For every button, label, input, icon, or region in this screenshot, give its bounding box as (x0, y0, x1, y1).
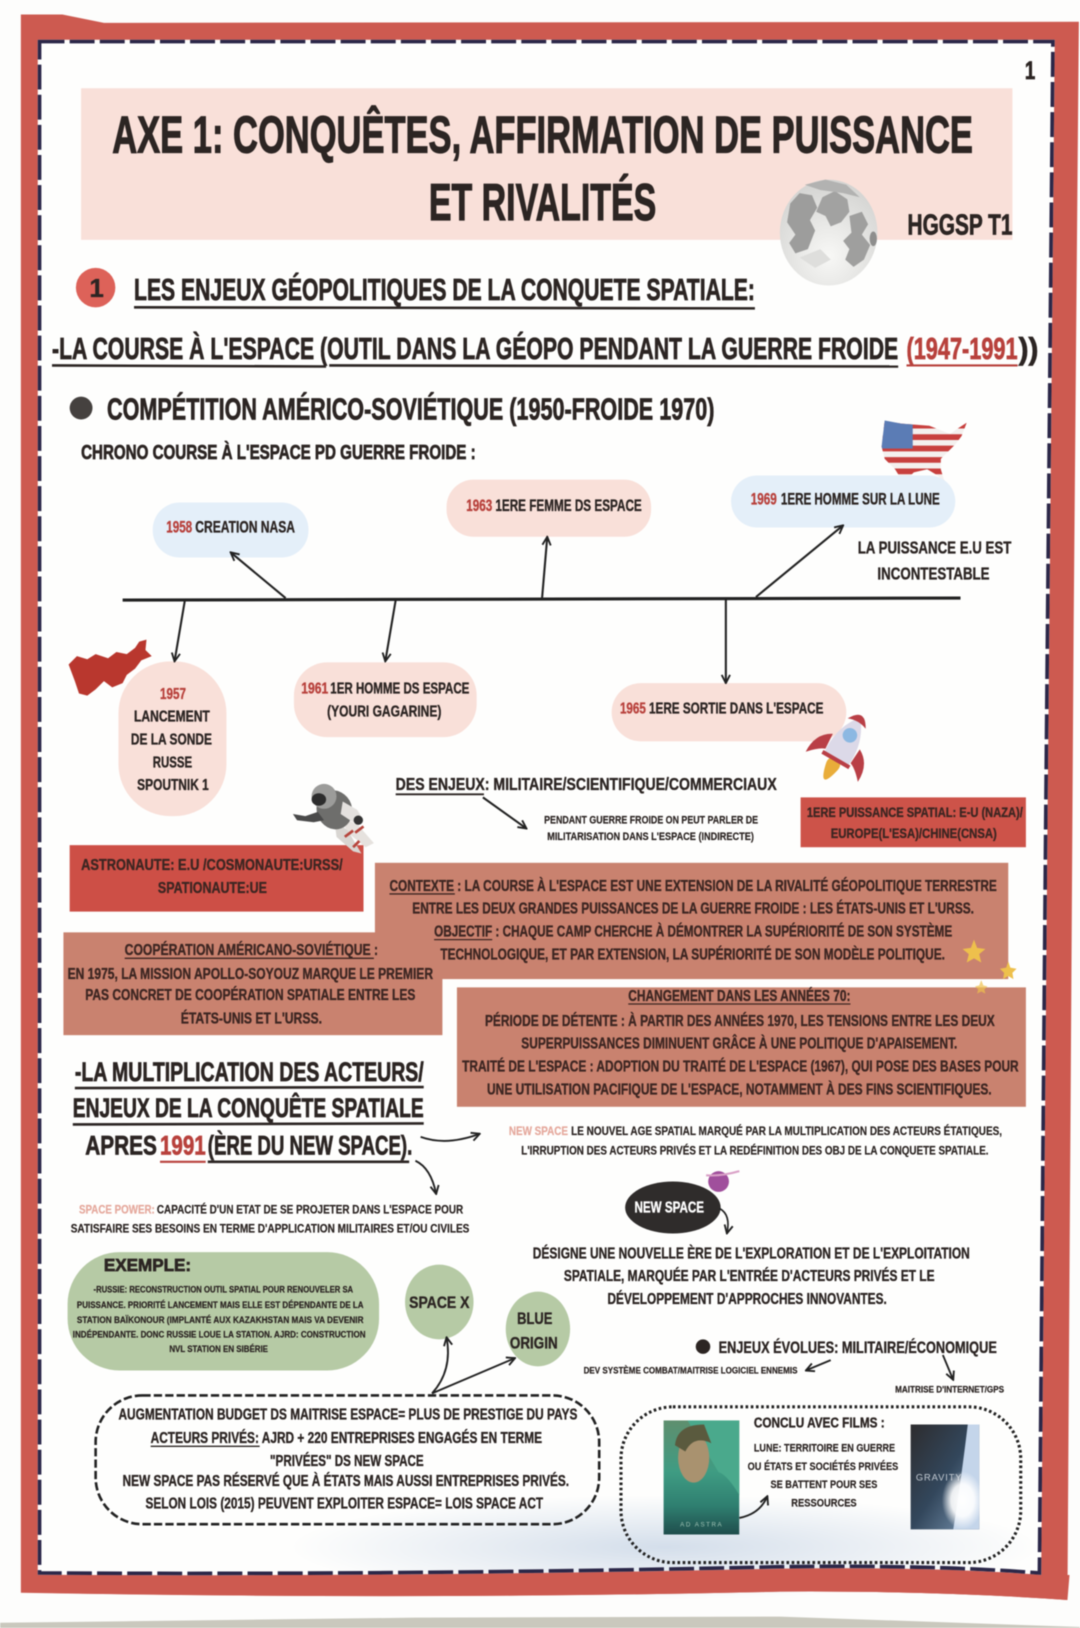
text: enjeux évolués: ENJEUX ÉVOLUES: MILITAIRE/ÉCONOMIQUE (719, 1338, 997, 1357)
box: coopération: EN 1975, LA MISSION APOLLO-SOYOUZ MARQUE LE PREMIER (68, 966, 433, 983)
note: militarisation (544, 814, 758, 843)
red band repair below shading (40, 1568, 1070, 1600)
heading: la multiplication des acteurs: (ÈRE DU NEW SPACE). (208, 1130, 412, 1161)
heading: la multiplication des acteurs (73, 1057, 424, 1162)
badge: new space: NEW SPACE (634, 1200, 704, 1217)
title banner (81, 88, 1012, 240)
note: puissance E.U: INCONTESTABLE (877, 563, 990, 583)
arrow to 1969 (756, 525, 843, 597)
timeline axis (123, 598, 960, 600)
bubble 1965: 1965 (620, 700, 646, 717)
number badge (76, 268, 115, 307)
bubble 1958 (153, 503, 308, 558)
page number: 1 (1025, 57, 1035, 85)
arrow to 1965 (725, 599, 727, 683)
box: astronaute: ASTRONAUTE: E.U /COSMONAUTE:URSS/ (81, 857, 343, 874)
panel: augmentation budget: NEW SPACE PAS RÉSERVÉ QUE À ÉTATS MAIS AUSSI ENTREPRISES PRIVÉS. (123, 1471, 569, 1490)
panel: exemple: PUISSANCE. PRIORITÉ LANCEMENT MAIS ELLE EST DÉPENDANTE DE LA (77, 1299, 364, 1310)
arrow: to blue origin (432, 1358, 515, 1393)
subheading: la course à l'espace: )) (1019, 333, 1038, 366)
panel: exemple (68, 1252, 379, 1371)
box: coopération (63, 932, 442, 1035)
note: maitrise internet: MAITRISE D'INTERNET/GPS (895, 1384, 1004, 1394)
film poster: gravity (911, 1424, 983, 1529)
box: 1ère puissance spatiale: EUROPE(L'ESA)/CHINE(CNSA) (831, 826, 997, 841)
note: puissance E.U (858, 537, 1012, 583)
text: space power definition: CAPACITÉ D'UN ETAT DE SE PROJETER DANS L'ESPACE POUR (157, 1202, 463, 1217)
arrow: des enjeux to note (483, 797, 527, 829)
panel: augmentation budget: ACTEURS PRIVÉS: AJRD + 220 ENTREPRISES ENGAGÉS EN TERME (151, 1428, 542, 1447)
bubble: blue origin: ORIGIN (510, 1334, 558, 1353)
icon: rocket (798, 700, 887, 794)
box: coopération: ÉTATS-UNIS ET L'URSS. (181, 1009, 322, 1028)
arrow to 1958 (231, 552, 286, 598)
text: désigne une nouvelle ère: DÉVELOPPEMENT D'APPROCHES INNOVANTES. (607, 1289, 887, 1308)
box: coopération: PAS CONCRET DE COOPÉRATION SPATIALE ENTRE LES (85, 985, 415, 1004)
panel: augmentation budget: AUGMENTATION BUDGET DS MAITRISE ESPACE= PLUS DE PRESTIGE DU PAYS (118, 1406, 577, 1423)
icon: planet (706, 1171, 739, 1192)
box: coopération: COOPÉRATION AMÉRICANO-SOVIÉTIQUE : (125, 940, 378, 959)
bullet heading: compétition (70, 392, 714, 426)
box: changement: SUPERPUISSANCES DIMINUENT GRÂCE À UNE POLITIQUE D'APAISEMENT. (521, 1034, 957, 1053)
number badge: 1 (89, 275, 104, 303)
bubble 1965: 1ERE SORTIE DANS L'ESPACE (649, 700, 823, 717)
title: ET RIVALITÉS (429, 174, 656, 232)
arrow: to maitrise internet (943, 1355, 953, 1380)
text: new space definition: L'IRRUPTION DES ACTEURS PRIVÉS ET LA REDÉFINITION DES OBJ DE LA CONQUETE SPATIALE. (521, 1143, 989, 1158)
section heading 1 (76, 268, 755, 308)
heading: la multiplication des acteurs: 1991 (160, 1131, 206, 1161)
panel: conclu avec films (621, 1407, 1021, 1563)
bubble: space x: SPACE X (409, 1293, 469, 1312)
note: militarisation: MILITARISATION DANS L'ESPACE (INDIRECTE) (547, 831, 754, 843)
panel: augmentation budget: "PRIVÉES" DS NEW SPACE (270, 1451, 424, 1470)
text: désigne une nouvelle ère: SPATIALE, MARQUÉE PAR L'ENTRÉE D'ACTEURS PRIVÉS ET LE (564, 1266, 935, 1285)
bubble 1961 (294, 662, 477, 737)
bubble 1961: (YOURI GAGARINE) (327, 703, 441, 720)
film poster: ad astra (664, 1420, 739, 1535)
arrow: new space to definition (720, 1209, 728, 1233)
note: puissance E.U: LA PUISSANCE E.U EST (858, 537, 1012, 557)
bubble 1963 (447, 480, 651, 537)
icon: astronaut (293, 784, 374, 853)
bubble 1958: CREATION NASA (195, 518, 295, 537)
bubble 1957: 1957 (160, 686, 186, 703)
icon: USA flag map (880, 420, 967, 479)
bubble 1961: 1ER HOMME DS ESPACE (330, 681, 469, 698)
bubble 1958: 1958 (166, 518, 192, 537)
text: space power definition: SATISFAIRE SES BESOINS EN TERME D'APPLICATION MILITAIRES ET/OU CIVILES (71, 1221, 469, 1235)
icon: stars (963, 940, 1017, 994)
box: astronaute (70, 845, 363, 912)
text: space power definition: SPACE POWER: (79, 1203, 155, 1217)
arrow: to space x (432, 1337, 448, 1393)
panel: exemple: EXEMPLE: (104, 1255, 191, 1275)
course label: HGGSP T1 (908, 210, 1012, 242)
text: désigne une nouvelle ère (533, 1243, 970, 1308)
text: new space definition (509, 1123, 1002, 1158)
box: changement (457, 986, 1026, 1107)
text: lune: RESSOURCES (791, 1498, 857, 1510)
text: lune: OU ÉTATS ET SOCIÉTÉS PRIVÉES (748, 1460, 899, 1473)
bubble 1957: DE LA SONDE (131, 731, 212, 748)
bubble 1957: SPOUTNIK 1 (137, 777, 209, 794)
heading: la multiplication des acteurs: APRES (85, 1131, 157, 1161)
bubble 1963: 1ERE FEMME DS ESPACE (495, 496, 642, 515)
box: changement: CHANGEMENT DANS LES ANNÉES 70: (628, 986, 850, 1005)
box: 1ère puissance spatiale: 1ERE PUISSANCE SPATIAL: E-U (NAZA)/ (807, 805, 1023, 820)
arrow to 1961 (385, 600, 396, 661)
arrow to 1963 (542, 537, 547, 598)
text: lune (748, 1442, 899, 1510)
table edge below sheet (0, 1617, 1080, 1628)
note: militarisation: PENDANT GUERRE FROIDE ON PEUT PARLER DE (544, 814, 758, 826)
title (112, 106, 973, 232)
bubble 1969: 1ERE HOMME SUR LA LUNE (781, 490, 940, 509)
icon: moon (780, 180, 877, 286)
bubble 1965 (612, 683, 846, 741)
heading: des enjeux: DES ENJEUX: MILITAIRE/SCIENTIFIQUE/COMMERCIAUX (396, 774, 777, 794)
bubble 1957: LANCEMENT (134, 709, 210, 726)
panel: exemple: STATION BAÏKONOUR (IMPLANTÉ AUX KAZAKHSTAN MAIS VA DEVENIR (77, 1314, 364, 1325)
arrow to 1957 (175, 600, 185, 661)
panel: exemple: -RUSSIE: RECONSTRUCTION OUTIL SPATIAL POUR RENOUVELER SA (94, 1285, 354, 1295)
arrow: to new space definition (421, 1134, 480, 1141)
bubble 1957: RUSSE (153, 754, 192, 771)
icon: USSR map (69, 640, 152, 696)
film poster: gravity: GRAVITY (916, 1473, 962, 1483)
panel: exemple: NVL STATION EN SIBÉRIE (169, 1343, 268, 1354)
bubble: blue origin: BLUE (517, 1309, 552, 1328)
bubble 1963: 1963 (466, 496, 492, 515)
panel: augmentation budget: SELON LOIS (2015) PEUVENT EXPLOITER ESPACE= LOIS SPACE ACT (145, 1496, 543, 1513)
text: new space definition: NEW SPACE (509, 1124, 568, 1138)
text: lune: SE BATTENT POUR SES (770, 1479, 878, 1491)
bubble 1969 (731, 476, 955, 527)
text: lune: LUNE: TERRITOIRE EN GUERRE (754, 1442, 895, 1454)
badge: new space (625, 1182, 721, 1233)
section heading 1: LES ENJEUX GÉOPOLITIQUES DE LA CONQUETE SPATIALE: (134, 273, 755, 307)
arrow: poster to text (739, 1496, 767, 1518)
note: dev système: DEV SYSTÈME COMBAT/MAITRISE LOGICIEL ENNEMIS (584, 1365, 798, 1376)
box background: contexte (375, 863, 1008, 979)
text: new space definition: LE NOUVEL AGE SPATIAL MARQUÉ PAR LA MULTIPLICATION DES ACTEURS ÉTATIQUES, (571, 1123, 1002, 1138)
arrow: to dev système (806, 1360, 831, 1371)
bubble 1961: 1961 (301, 681, 328, 698)
bottom page shading (291, 1495, 1038, 1599)
timeline (123, 525, 960, 683)
heading: la multiplication des acteurs: ENJEUX DE LA CONQUÊTE SPATIALE (73, 1092, 424, 1123)
text: space power definition (71, 1202, 469, 1235)
text: contexte (389, 876, 997, 963)
bubble 1969: 1969 (751, 490, 777, 509)
box: astronaute: SPATIONAUTE:UE (158, 880, 267, 897)
panel: exemple: INDÉPENDANTE. DONC RUSSIE LOUE LA STATION. AJRD: CONSTRUCTION (73, 1328, 366, 1339)
box: 1ère puissance spatiale (801, 797, 1026, 847)
bubble: space x (405, 1265, 474, 1339)
bubble 1957 (118, 661, 226, 816)
heading: la multiplication des acteurs: -LA MULTIPLICATION DES ACTEURS/ (75, 1057, 424, 1087)
bubble: blue origin (506, 1292, 570, 1366)
heading: conclu: CONCLU AVEC FILMS : (754, 1416, 885, 1432)
subheading: la course à l'espace: (1947-1991 (907, 333, 1018, 366)
film poster: ad astra: AD ASTRA (680, 1521, 723, 1528)
bullet heading: compétition: COMPÉTITION AMÉRICO-SOVIÉTIQUE (1950-FROIDE 1970) (107, 392, 714, 426)
panel: augmentation budget (96, 1395, 599, 1524)
arrow: to space power (415, 1161, 436, 1194)
chrono label: CHRONO COURSE À L'ESPACE PD GUERRE FROIDE : (81, 441, 476, 464)
